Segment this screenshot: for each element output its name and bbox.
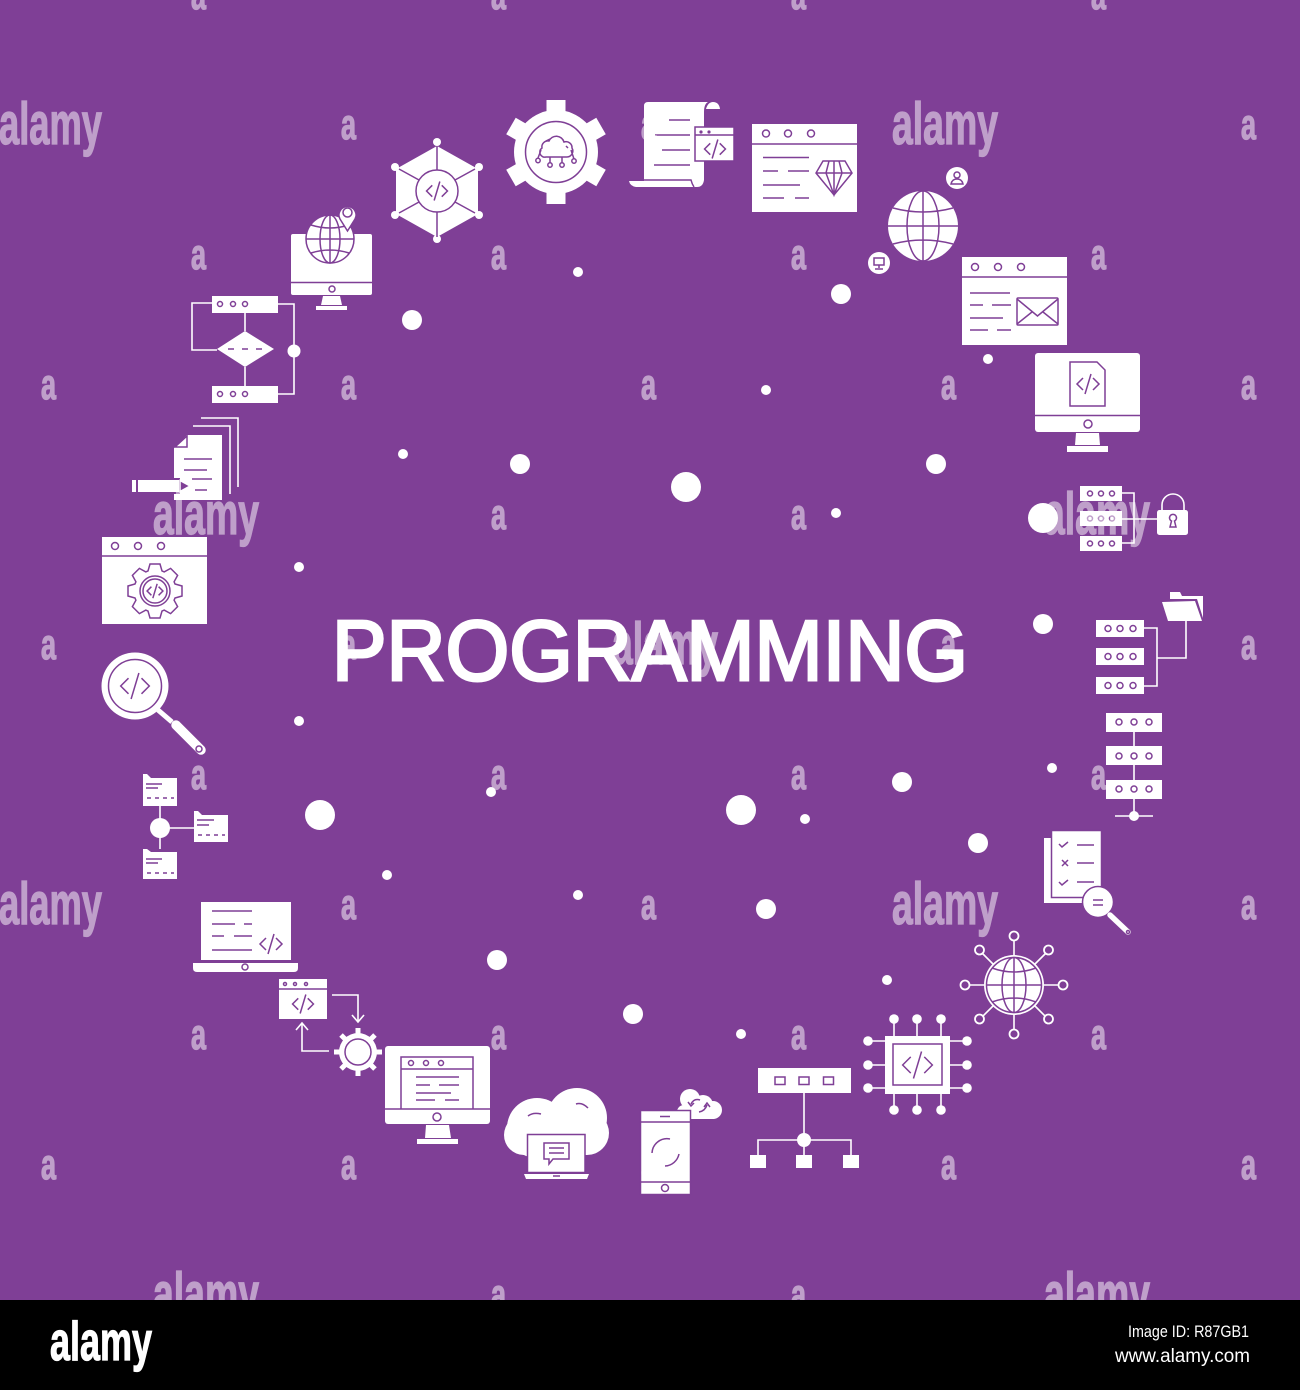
icon: connected folders [143, 774, 228, 879]
watermark overlay: a [191, 231, 207, 279]
icon: code hexagon network [391, 138, 483, 243]
website: www.alamy.com [1114, 1346, 1250, 1367]
watermark overlay: a [491, 231, 507, 279]
icon: server stack [1106, 713, 1162, 821]
watermark overlay: a [491, 751, 507, 799]
icon: globe with user and device nodes [868, 167, 968, 274]
icon: monitor with globe and location pin [291, 206, 372, 310]
icon: servers with padlock [1080, 486, 1188, 551]
watermark overlay: alamy [153, 1261, 259, 1327]
watermark overlay: alamy [0, 91, 102, 157]
icon: monitor with code window [385, 1046, 490, 1144]
watermark overlay: a [1241, 1141, 1257, 1189]
watermark overlay: a [1241, 621, 1257, 669]
watermark overlay: a [491, 1271, 507, 1319]
icon: browser window with code gear [102, 537, 207, 624]
icon: laptop with code [193, 902, 298, 972]
watermark overlay: a [941, 1141, 957, 1189]
watermark overlay: a [1241, 361, 1257, 409]
icon: code processor chip [863, 1014, 972, 1115]
watermark overlay: a [191, 1011, 207, 1059]
watermark overlay: a [791, 751, 807, 799]
watermark overlay: a [41, 621, 57, 669]
watermark overlay: a [791, 491, 807, 539]
watermark overlay: a [191, 751, 207, 799]
icon: flowchart [192, 296, 300, 403]
icon: hierarchy network switch [750, 1068, 859, 1168]
icon: monitor with code file [1035, 353, 1140, 452]
icon: browser window with envelope [962, 257, 1067, 345]
watermark overlay: alamy [612, 611, 718, 677]
scattered decorative dots [294, 267, 1058, 1039]
image id: Image ID: R87GB1 [1128, 1322, 1249, 1341]
watermark overlay: a [791, 1011, 807, 1059]
watermark overlay: a [641, 101, 657, 149]
watermark overlay: alamy [0, 871, 102, 937]
watermark overlay: a [341, 621, 357, 669]
icon: globe with network nodes [960, 932, 1068, 1038]
watermark overlay: a [41, 361, 57, 409]
icon: cloud gear [506, 100, 606, 204]
watermark overlay: a [1091, 1011, 1107, 1059]
watermark overlay: alamy [153, 481, 259, 547]
watermark overlay: a [1091, 231, 1107, 279]
watermark overlay: a [341, 361, 357, 409]
icon: code magnifier [102, 652, 202, 752]
watermark overlay: alamy [1044, 481, 1150, 547]
title: PROGRAMMING [332, 604, 968, 699]
watermark overlay: a [1241, 101, 1257, 149]
watermark overlay: a [1241, 881, 1257, 929]
watermark overlay: alamy [892, 871, 998, 937]
watermark overlay: a [941, 621, 957, 669]
watermark overlay: a [341, 101, 357, 149]
footer logo: alamy [50, 1310, 152, 1372]
watermark overlay: alamy [892, 91, 998, 157]
watermark overlay: a [641, 881, 657, 929]
footer bar [0, 1300, 1300, 1390]
watermark overlay: a [341, 1141, 357, 1189]
watermark overlay: a [1091, 751, 1107, 799]
icon: documents with pen [130, 418, 238, 500]
watermark overlay: a [491, 491, 507, 539]
icon: browser window with diamond [752, 124, 857, 212]
watermark overlay: a [41, 1141, 57, 1189]
watermark overlay: a [941, 361, 957, 409]
icon: servers with folder [1096, 592, 1203, 694]
watermark overlay: a [791, 1271, 807, 1319]
icon: smartphone cloud sync [640, 1089, 722, 1194]
icon: checklist with magnifier [1044, 830, 1130, 934]
icon: cloud with laptop chat [504, 1088, 609, 1179]
watermark overlay: a [491, 1011, 507, 1059]
watermark overlay: a [791, 231, 807, 279]
watermark overlay: a [341, 881, 357, 929]
watermark overlay: a [641, 361, 657, 409]
icon: code script scroll [629, 102, 734, 187]
watermark overlay: a [641, 1141, 657, 1189]
icon: code window and gear cycle [279, 979, 382, 1076]
watermark overlay: alamy [1044, 1261, 1150, 1327]
